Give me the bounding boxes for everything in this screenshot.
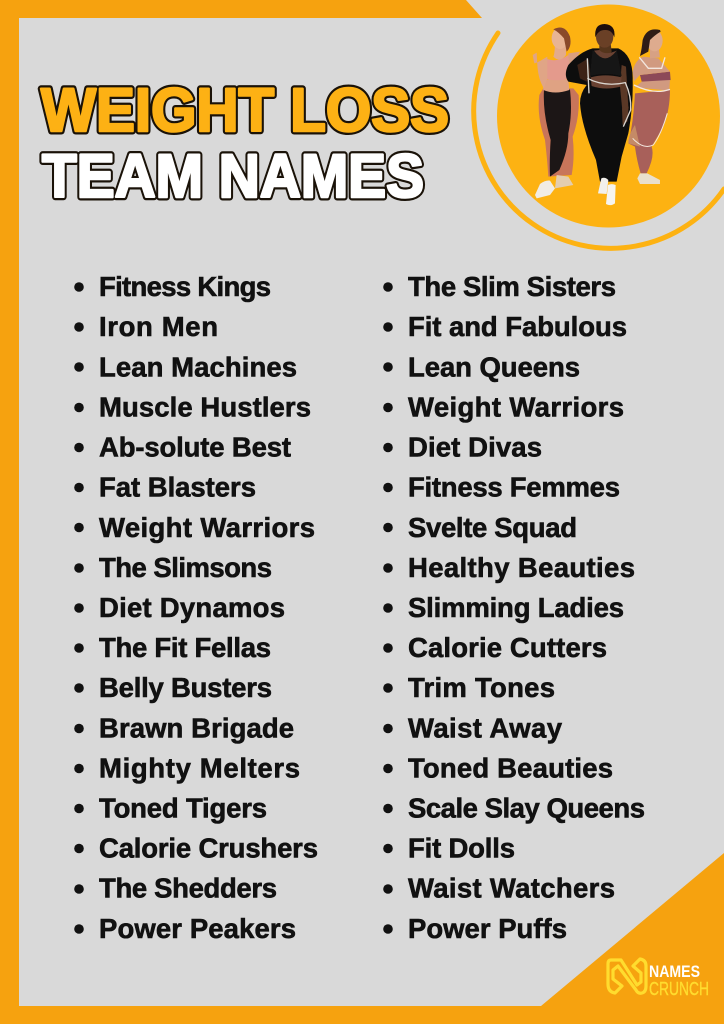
- title line: team names: TEAM NAMES: [42, 142, 424, 210]
- woman right: [628, 29, 671, 184]
- item: Weight Warriors: [99, 512, 315, 543]
- item: Fitness Kings: [99, 271, 271, 302]
- item: The Slim Sisters: [408, 271, 616, 302]
- item: Iron Men: [99, 311, 218, 342]
- logo: names crunch: [608, 959, 709, 999]
- item: Fitness Femmes: [408, 472, 620, 503]
- item: Muscle Hustlers: [99, 392, 311, 422]
- woman centre: [566, 24, 633, 205]
- title: [41, 76, 449, 210]
- item: Brawn Brigade: [99, 712, 294, 743]
- title line: weight loss: WEIGHT LOSS: [41, 76, 449, 144]
- list column: right: [383, 271, 645, 944]
- list column: left: [74, 271, 318, 944]
- item: Belly Busters: [99, 672, 272, 703]
- item: Fit and Fabulous: [408, 311, 627, 342]
- item: Lean Queens: [408, 351, 580, 382]
- item: Toned Beauties: [408, 752, 613, 783]
- item: Fat Blasters: [99, 472, 256, 503]
- item: Svelte Squad: [408, 512, 577, 543]
- item: Waist Away: [408, 712, 563, 743]
- photo circle: [497, 4, 720, 228]
- item: Scale Slay Queens: [408, 792, 645, 824]
- item: The Fit Fellas: [99, 632, 271, 663]
- wordmark: NAMES: [649, 962, 700, 981]
- illustration: three women with measuring tape: [533, 24, 671, 205]
- item: Calorie Crushers: [99, 833, 318, 864]
- item: Waist Watchers: [408, 873, 615, 904]
- item: Lean Machines: [99, 351, 297, 382]
- item: Weight Warriors: [408, 392, 624, 422]
- item: Calorie Cutters: [408, 632, 607, 663]
- item: Slimming Ladies: [408, 592, 624, 623]
- item: Diet Divas: [408, 432, 542, 463]
- woman left: [533, 27, 580, 198]
- item: Trim Tones: [408, 672, 555, 703]
- item: The Slimsons: [99, 552, 272, 583]
- item: Healthy Beauties: [408, 552, 635, 583]
- item: Power Puffs: [408, 913, 567, 944]
- item: Ab-solute Best: [99, 432, 291, 463]
- item: The Shedders: [99, 873, 277, 904]
- item: Fit Dolls: [408, 833, 515, 864]
- item: Power Peakers: [99, 913, 296, 944]
- title line: team names: TEAM NAMES: [42, 142, 424, 210]
- decorative ring arc: [474, 33, 724, 248]
- icon: N mark: [608, 959, 646, 993]
- item: Toned Tigers: [99, 792, 267, 824]
- title line: weight loss: WEIGHT LOSS: [41, 76, 449, 144]
- wordmark: [649, 962, 709, 999]
- item: Diet Dynamos: [99, 592, 285, 623]
- item: Mighty Melters: [99, 752, 300, 783]
